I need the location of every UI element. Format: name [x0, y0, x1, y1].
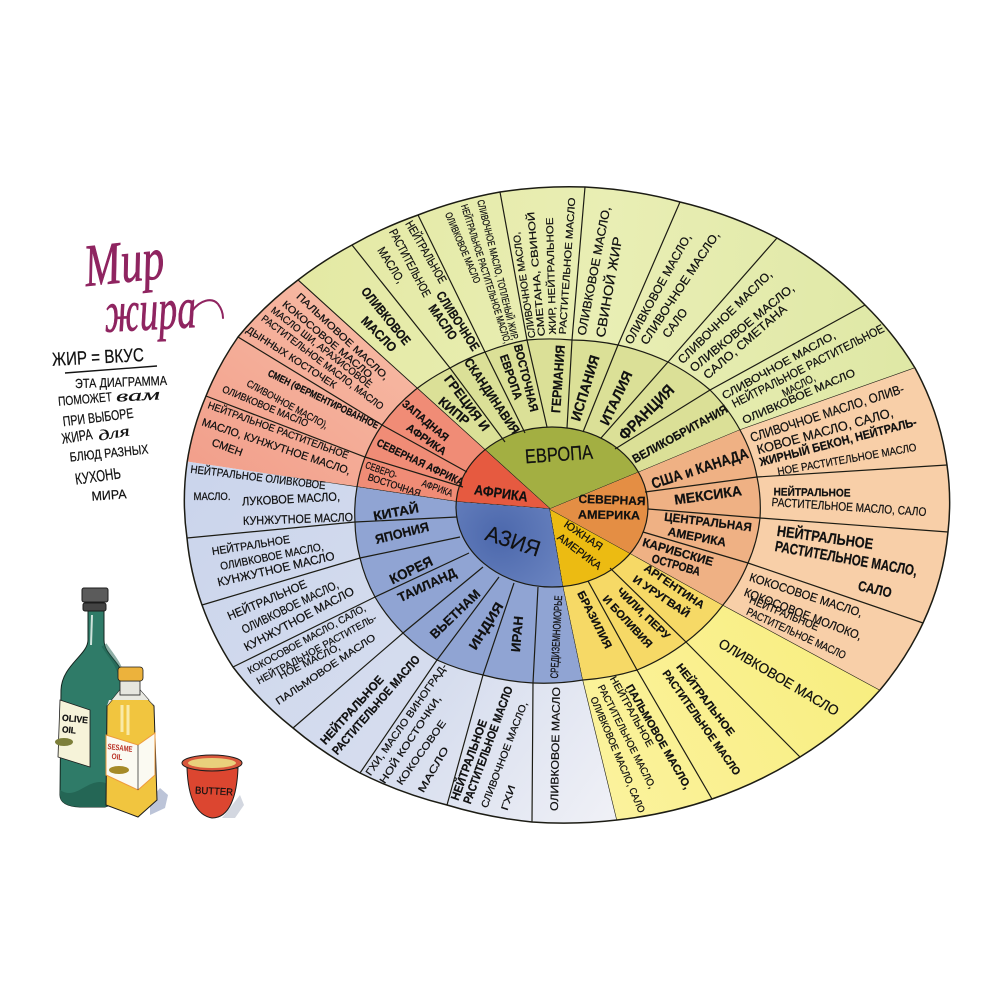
fat lists: Europe: ОЛИВКОВОЕ МАСЛО,	[687, 281, 797, 375]
region labels: Europe	[435, 343, 730, 466]
fat wheel chart	[126, 186, 950, 824]
fat lists: North America: РАСТИТЕЛЬНОЕ МАСЛО	[744, 606, 848, 662]
region labels: Europe: ИСПАНИЯ	[567, 353, 603, 423]
fat lists: Europe: СЛИВОЧНОЕ МАСЛО,	[637, 229, 723, 347]
fat lists: Asia: МАСЛО	[416, 745, 452, 795]
fat lists: Asia: КОКОСОВОЕ МАСЛО, САЛО,	[246, 603, 368, 677]
region labels: Africa: ЗАПАДНАЯ	[399, 398, 451, 444]
fat lists: Europe: ОЛИВКОВОЕ МАСЛО	[442, 211, 482, 285]
fat lists: North America: НЕЙТРАЛЬНОЕ	[773, 485, 851, 500]
fat lists: Europe: ОЛИВКОВОЕ МАСЛО	[741, 367, 858, 427]
label: Europe: ЕВРОПА	[524, 442, 594, 468]
fat lists: South America: НЕЙТРАЛЬНОЕ	[673, 661, 737, 739]
illustration: oil bottles	[55, 588, 168, 817]
fat lists: Europe: РАСТИТЕЛЬНОЕ	[386, 227, 434, 299]
label: South America: ЮЖНАЯ	[561, 519, 605, 553]
intro text block: БЛЮД РАЗНЫХ	[69, 441, 149, 465]
fat lists: Africa: ДЫННЫХ КОСТОЧЕК	[244, 325, 338, 391]
fat lists: South America	[588, 635, 842, 815]
region labels: North America	[641, 445, 753, 579]
fat lists: Europe: НЕЙТРАЛЬНОЕ	[402, 218, 450, 286]
fat lists: Europe: ОЛИВКОВОЕ	[358, 284, 414, 348]
fat lists: North America: НОЕ РАСТИТЕЛЬНОЕ МАСЛО	[777, 442, 918, 478]
fat lists: Asia: ГХИ, МАСЛО ВИНОГРАД-	[364, 662, 450, 778]
fat lists: Europe: СМЕТАНА, СВИНОЙ	[524, 211, 548, 337]
fat lists: Africa: ПАЛЬМОВОЕ МАСЛО,	[294, 291, 390, 383]
fat lists: Asia: НЕЙТРАЛЬНОЕ	[225, 576, 309, 623]
fat lists: Asia: РАСТИТЕЛЬНОЕ МАСЛО	[329, 652, 423, 758]
fat lists: North America: КОВОЕ МАСЛО, САЛО,	[755, 405, 895, 457]
panel: Europe	[298, 188, 914, 509]
title: Мир	[80, 225, 167, 299]
icon: butter pot: BUTTER	[195, 786, 233, 798]
fat lists: Europe: МАСЛО	[358, 313, 400, 355]
fat lists: Asia: НЕЙТРАЛЬНОЕ	[317, 672, 387, 747]
region labels: Europe: СКАНДИНАВИЯ	[461, 355, 523, 437]
fat lists: South America: ПАЛЬМОВОЕ МАСЛО,	[623, 682, 693, 792]
fat lists: North America: РАСТИТЕЛЬНОЕ МАСЛО, САЛО	[771, 495, 927, 519]
fat lists: North America: КОКОСОВОЕ МОЛОКО,	[742, 585, 864, 643]
label: South America: АМЕРИКА	[555, 532, 604, 573]
panel: South America	[550, 510, 880, 820]
region labels: Europe: ГЕРМАНИЯ	[548, 345, 568, 413]
fat lists: Asia: ЛУКОВОЕ МАСЛО,	[242, 489, 340, 509]
fat lists: Asia: ОЛИВКОВОЕ МАСЛО,	[219, 541, 325, 573]
region labels: Africa: СЕВЕРО-	[364, 460, 398, 482]
fat lists: Asia: ОЛИВКОВОЕ МАСЛО,	[239, 577, 341, 637]
intro text block: ЖИРА	[60, 426, 94, 448]
fat lists: Europe: СЛИВОЧНОЕ МАСЛО,	[675, 267, 775, 367]
region labels: North America: ЦЕНТРАЛЬНАЯ	[663, 510, 753, 534]
fat lists: Asia: ПАЛЬМОВОЕ МАСЛО	[274, 632, 378, 708]
fat lists: Europe: СЛИВОЧНОЕ МАСЛО, ТОПЛЕНЫЙ ЖИР,	[474, 198, 522, 341]
region labels: Asia: ИНДИЯ	[466, 600, 506, 652]
region labels: Africa	[364, 398, 465, 500]
fat lists: Africa: МАСЛО ШИ, АРАХИСОВОЕ	[268, 305, 374, 391]
fat lists: Africa	[200, 291, 390, 477]
icon: butter pot	[182, 755, 244, 818]
fat lists: South America: ОЛИВКОВОЕ МАСЛО, САЛО	[588, 695, 647, 815]
fat lists: Africa: СЛИВОЧНОЕ МАСЛО),	[244, 378, 330, 432]
region labels: Asia: КОРЕЯ	[387, 553, 435, 587]
region labels: Asia	[372, 500, 565, 679]
fat lists: South America: НЕЙТРАЛЬНОЕ	[607, 674, 657, 750]
fat lists: North America: ЖИРНЫЙ БЕКОН, НЕЙТРАЛЬ-	[757, 414, 918, 469]
region labels: South America	[574, 562, 706, 651]
fat lists: Africa: НЕЙТРАЛЬНОЕ РАСТИТЕЛЬНОЕ	[206, 398, 351, 462]
region labels: Asia: ТАИЛАНД	[395, 565, 459, 605]
heading: fat equals flavour: ЖИР = ВКУС	[52, 345, 144, 371]
fat lists: Europe: МАСЛО,	[374, 244, 408, 286]
region labels: North America: АМЕРИКА	[667, 524, 728, 550]
region labels: North America: США и КАНАДА	[649, 445, 751, 493]
region labels: Europe: ВОСТОЧНАЯ	[511, 343, 541, 413]
fat lists: North America: САЛО	[857, 577, 893, 601]
fat lists: Europe: РАСТИТЕЛЬНОЕ МАСЛО	[558, 197, 578, 335]
region labels: Asia: ВЬЕТНАМ	[427, 586, 483, 642]
fat lists: South America: ОЛИВКОВОЕ МАСЛО	[716, 635, 842, 719]
fat lists: Asia	[190, 463, 563, 812]
fat lists: North America: КОКОСОВОЕ МАСЛО,	[748, 570, 864, 620]
region labels: Europe: ЕВРОПА	[497, 353, 525, 402]
icon: sesame oil bottle: SESAME	[107, 742, 133, 754]
intro text block: вам	[116, 386, 160, 406]
fat lists: Europe: ОЛИВКОВОЕ МАСЛО,	[575, 205, 613, 337]
fat lists: Asia: КОКОСОВОЕ	[395, 718, 449, 788]
region labels: Europe: ИТАЛИЯ	[596, 368, 636, 428]
fat lists: Africa: СМЕН (ФЕРМЕНТИРОВАННОЕ	[266, 368, 380, 432]
region labels: South America: И УРУГВАЙ	[630, 573, 692, 620]
fat lists: Africa: МАСЛО, КУНЖУТНОЕ МАСЛО,	[200, 417, 352, 477]
fat lists: South America: РАСТИТЕЛЬНОЕ МАСЛО	[660, 668, 743, 778]
fat lists: Africa: ОЛИВКОВОЕ МАСЛО	[220, 384, 310, 430]
label: North America	[578, 492, 646, 523]
fat lists: Asia: КУНЖУТНОЕ МАСЛО	[243, 510, 353, 528]
fat lists: Europe: САЛО	[659, 306, 691, 340]
region labels: Europe: КИПР	[435, 394, 473, 429]
fat lists: Europe: СЛИВОЧНОЕ МАСЛО,	[720, 330, 838, 402]
fat lists: Asia: НЕЙТРАЛЬНОЕ	[211, 533, 291, 558]
icon: sesame oil bottle	[106, 667, 157, 817]
label: North America: АМЕРИКА	[578, 507, 640, 523]
region labels: Africa: ВОСТОЧНАЯ	[366, 472, 422, 500]
intro text block: ЭТА ДИАГРАММА	[75, 373, 168, 391]
fat lists: Asia: СЛИВОЧНОЕ МАСЛО,	[480, 700, 530, 810]
region labels: Asia: СРЕДИЗЕМНОМОРЬЕ	[549, 595, 565, 679]
fat lists: Europe: САЛО, СМЕТАНА	[700, 302, 790, 382]
region labels: Africa: АФРИКА	[420, 478, 454, 500]
fat lists: North America: СЛИВОЧНОЕ МАСЛО, ОЛИВ-	[748, 381, 906, 445]
panel: Africa	[188, 280, 550, 509]
region labels: South America: И БОЛИВИЯ	[600, 593, 654, 651]
fat lists: Europe: ЖИР, НЕЙТРАЛЬНОЕ	[543, 217, 559, 335]
icon: olive oil bottle	[55, 588, 125, 807]
fat lists: Asia: НЕЙТРАЛЬНОЕ РАСТИТЕЛЬ-	[254, 611, 379, 687]
fat lists: Africa: СМЕН	[210, 437, 244, 459]
region labels: Asia: КИТАЙ	[372, 500, 420, 524]
fat lists: Asia: НОЙ КОСТОЧКИ,	[376, 693, 444, 786]
icon: olive oil bottle: OLIVE	[62, 713, 88, 725]
panel: North America	[550, 368, 949, 690]
fat lists: Asia: ГХИ	[500, 784, 518, 812]
fat lists: Europe: НЕЙТРАЛЬНОЕ РАСТИТЕЛЬНОЕ МАСЛО,	[458, 203, 514, 345]
fat lists: Africa: РАСТИТЕЛЬНОЕ МАСЛО, МАСЛО	[259, 313, 385, 413]
fat lists: Europe	[358, 197, 886, 427]
intro text block: для	[97, 423, 131, 445]
region labels: North America: МЕКСИКА	[673, 482, 743, 508]
title	[80, 225, 223, 345]
fat lists: Asia: РАСТИТЕЛЬНОЕ МАСЛО	[460, 684, 516, 806]
intro text block	[52, 345, 168, 504]
region labels: Europe: ВЕЛИКОБРИТАНИЯ	[630, 402, 730, 466]
region labels: South America: БРАЗИЛИЯ	[574, 589, 614, 651]
fat lists: North America: РАСТИТЕЛЬНОЕ МАСЛО,	[774, 538, 918, 580]
fat lists: Asia: МАСЛО.	[194, 491, 230, 503]
region labels: North America: КАРИБСКИЕ	[641, 535, 715, 569]
intro text block: ПОМОЖЕТ	[57, 389, 113, 409]
intro text block: МИРА	[91, 486, 127, 504]
fat lists: Asia: КУНЖУТНОЕ МАСЛО	[216, 549, 336, 589]
region labels: South America: ЧИЛИ, ПЕРУ	[614, 586, 672, 642]
region labels: North America: ОСТРОВА	[650, 551, 702, 579]
icon: bottle shadow	[150, 788, 168, 815]
label: North America: СЕВЕРНАЯ	[578, 492, 646, 508]
fat lists: North America	[742, 381, 927, 662]
icon: sesame oil bottle: OIL	[111, 752, 123, 762]
region labels: Europe: ГРЕЦИЯ И	[441, 372, 493, 434]
intro text block: ПРИ ВЫБОРЕ	[62, 405, 134, 429]
fat lists: Europe: МАСЛО,	[780, 372, 818, 400]
fat lists: Europe: СЛИВОЧНОЕ	[433, 288, 483, 354]
title: жира	[102, 275, 198, 345]
region labels: Asia: ЯПОНИЯ	[374, 519, 430, 547]
icon: olive oil bottle: OIL	[62, 724, 77, 736]
fat lists: Asia: НОЕ МАСЛО,	[278, 642, 342, 682]
fat lists: North America: НЕЙТРАЛЬНОЕ	[748, 593, 821, 634]
fat lists: Europe: ОЛИВКОВОЕ МАСЛО,	[622, 231, 694, 347]
fat lists: South America: РАСТИТЕЛЬНОЕ МАСЛО,	[595, 683, 657, 791]
fat lists: Europe: СЛИВОЧНОЕ МАСЛО,	[512, 231, 538, 339]
label: Asia: АЗИЯ	[483, 520, 543, 562]
intro text block: КУХОНЬ	[74, 465, 122, 489]
fat lists: North America: НЕЙТРАЛЬНОЕ	[776, 522, 874, 553]
panel: Asia	[185, 462, 617, 822]
region labels: Africa: СЕВЕРНАЯ АФРИКА	[375, 437, 465, 489]
fat lists: Europe: НЕЙТРАЛЬНОЕ РАСТИТЕЛЬНОЕ	[729, 321, 886, 411]
region labels: Europe: ФРАНЦИЯ	[616, 382, 678, 444]
region labels: Asia: ИРАН	[508, 615, 526, 653]
region labels: South America: АРГЕНТИНА	[642, 562, 706, 612]
region labels: Africa: АФРИКА	[404, 422, 448, 458]
fat lists: Asia: КУНЖУТНОЕ МАСЛО	[241, 584, 357, 654]
fat lists: Asia: ОЛИВКОВОЕ МАСЛО	[549, 686, 563, 811]
fat lists: Asia: НЕЙТРАЛЬНОЕ ОЛИВКОВОЕ	[190, 463, 326, 492]
fat lists: Africa: КОКОСОВОЕ МАСЛО,	[280, 299, 376, 383]
label: Africa: АФРИКА	[473, 481, 529, 505]
fat lists: Asia: НЕЙТРАЛЬНОЕ	[447, 717, 490, 802]
fat lists: Europe: МАСЛО	[425, 301, 461, 343]
fat lists: Europe: СВИНОЙ ЖИР	[593, 235, 625, 339]
